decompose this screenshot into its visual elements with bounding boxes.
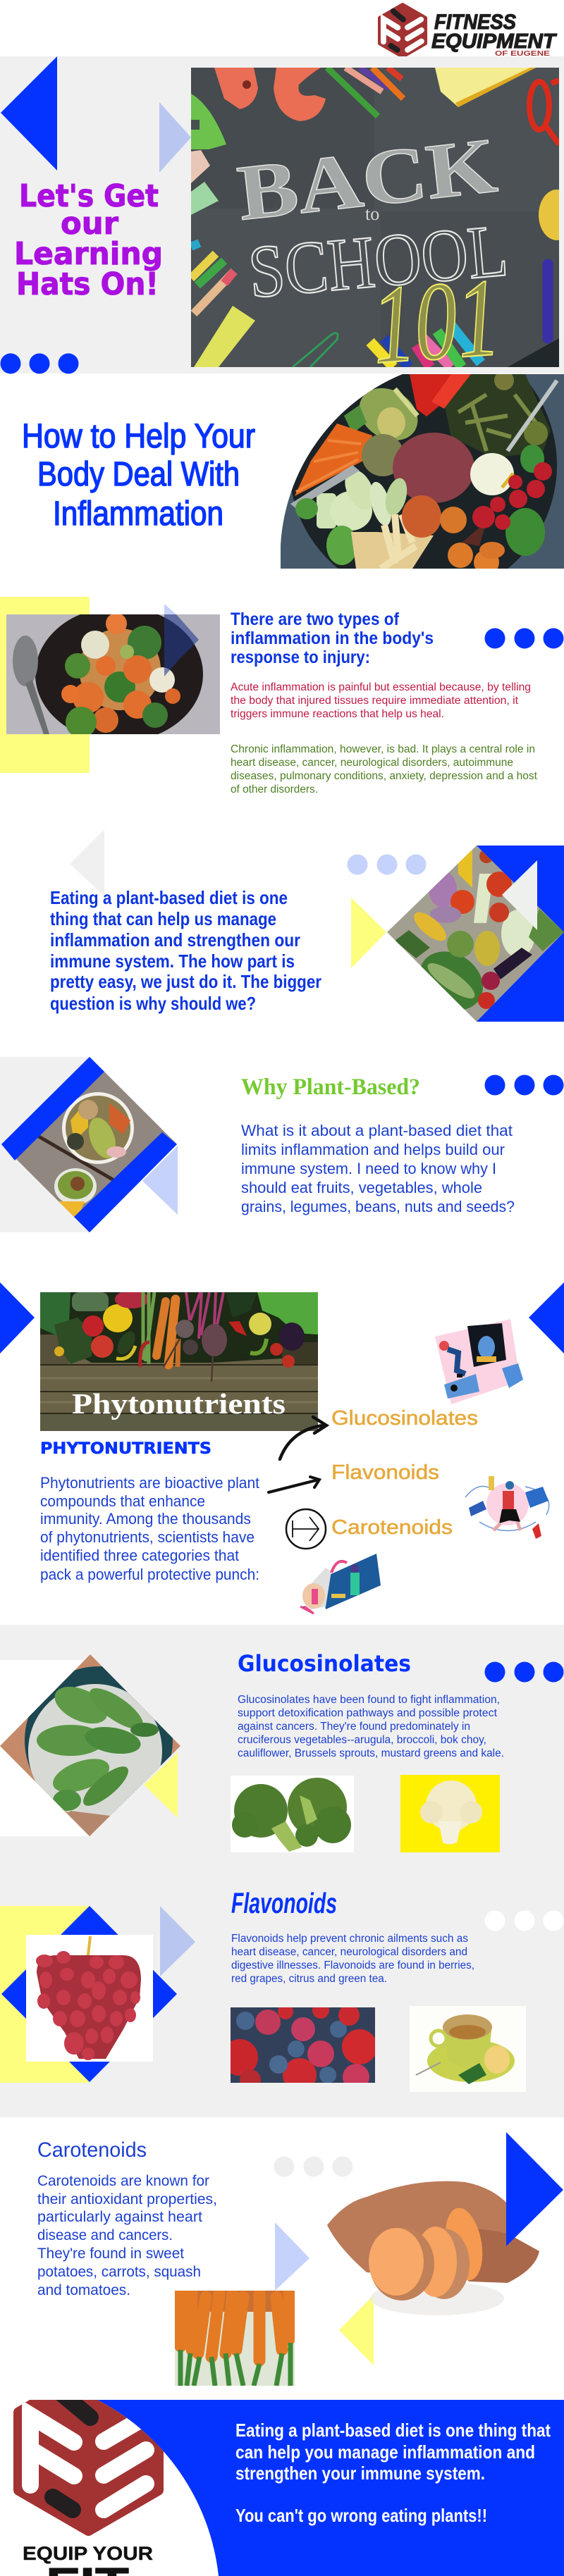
parsnips [351, 532, 434, 569]
photo: vegetable bowl [281, 374, 564, 569]
intro text: immune system. The how part is [50, 950, 295, 972]
heading: response to injury: [231, 648, 370, 667]
blue diamond [1, 1906, 177, 2082]
paragraph: What is it about a plant-based diet that [241, 1122, 513, 1139]
triangle: light blue [275, 2222, 309, 2291]
triangle: blue [1, 56, 57, 171]
logo wordmark: EQUIPMENT [431, 30, 557, 53]
paragraph: Carotenoids are known for [37, 2173, 209, 2189]
panel: two types of inflammation [0, 597, 564, 795]
photo: vegetables on wood [40, 1290, 318, 1431]
heading: How to Help Your [22, 418, 255, 455]
paragraph: potatoes, carrots, squash [37, 2264, 201, 2280]
chronic text: heart disease, cancer, neurological disorders, autoimmune [231, 757, 513, 769]
intro text [50, 887, 321, 1014]
grey block [0, 1057, 90, 1232]
carrots [295, 423, 372, 496]
intro text: question is why should we? [50, 993, 256, 1014]
arrow: to glucosinolates [280, 1417, 326, 1459]
illustration: people with card [300, 1554, 381, 1614]
illustration: dog walker [465, 1476, 549, 1539]
intro text: pretty easy, we just do it. The bigger [50, 971, 321, 992]
triangle: yellow [339, 2295, 374, 2365]
paragraph: pack a powerful protective punch: [40, 1566, 259, 1583]
illustration: people with laptop [435, 1319, 523, 1404]
paragraph: flavonoids: heart disease, cancer, neurological disorders and [231, 1946, 467, 1958]
heading: flavonoids: Flavonoids [231, 1887, 337, 1919]
photo: chalkboard back to school [191, 68, 564, 388]
red peppers [410, 374, 451, 416]
paragraph: and tomatoes. [37, 2282, 130, 2298]
logo [19, 2372, 158, 2530]
intro text: inflammation and strengthen our [50, 929, 300, 950]
dots [0, 354, 79, 373]
acute text: Acute inflammation is painful but essential because, by telling [231, 681, 531, 693]
yogurt [470, 453, 514, 495]
blue block [477, 846, 564, 1022]
photo: green tea [410, 2006, 526, 2092]
photo: broccoli [231, 1776, 354, 1852]
paragraph: glucosinolates: against cancers. They're found predominately in [238, 1721, 470, 1733]
closing text: strengthen your immune system. [235, 2463, 485, 2484]
paragraph [40, 1474, 259, 1583]
chalk lettering [236, 140, 506, 364]
photo: red grapes [26, 1935, 153, 2062]
paragraph: flavonoids: digestive illnesses. Flavonoids are found in berries, [231, 1959, 474, 1971]
leaves by carrots [344, 405, 367, 430]
paragraph: compounds that enhance [40, 1492, 205, 1510]
greens [40, 1292, 70, 1335]
chronic text: Chronic inflammation, however, is bad. It plays a central role in [231, 743, 535, 755]
acute text: triggers immune reactions that help us heal. [231, 708, 444, 720]
notebook [435, 68, 536, 107]
chalk lettering: BACK [233, 122, 501, 237]
logo wordmark: FITNESS [434, 11, 516, 34]
triangle: yellow [144, 1752, 178, 1818]
heading: Inflammation [53, 495, 223, 533]
panel: back to school hero [0, 56, 564, 388]
photo caption: Phytonutrients [72, 1387, 286, 1420]
dots [485, 628, 564, 648]
photo: arugula diamond [0, 1654, 180, 1836]
yarn ball [539, 190, 559, 240]
paragraph: disease and cancers. [37, 2227, 173, 2243]
beets [176, 1320, 194, 1338]
panel: why plant-based [0, 1057, 564, 1233]
paragraph: glucosinolates: Glucosinolates have been found to fight inflammation, [238, 1694, 500, 1706]
paragraph: should eat fruits, vegetables, whole [241, 1179, 482, 1196]
paragraph: their antioxidant properties, [37, 2191, 217, 2207]
paragraph: glucosinolates: support detoxification pathways and possible protect [238, 1707, 498, 1719]
chalk lettering: SCHOOL [245, 209, 511, 314]
photo: berries [221, 2002, 377, 2092]
paragraph: grains, legumes, beans, nuts and seeds? [241, 1198, 515, 1215]
paragraph: glucosinolates: cruciferous vegetables--arugula, broccoli, bok choy, [238, 1734, 486, 1746]
paragraph: They're found in sweet [37, 2246, 184, 2262]
paragraph: flavonoids [231, 1933, 474, 1985]
blue bands [1, 1057, 177, 1232]
red rice [393, 433, 474, 503]
panel: phytonutrients [0, 1282, 564, 1614]
vegetables [79, 628, 161, 710]
paragraph: particularly against heart [37, 2209, 202, 2225]
title: let's get our learning hats on: Learning [14, 236, 163, 272]
acute text [231, 681, 531, 720]
paragraph: Phytonutrients are bioactive plant [40, 1474, 259, 1492]
paragraph: glucosinolates: cauliflower, Brussels sprouts, mustard greens and kale. [238, 1747, 504, 1759]
avocado [360, 388, 417, 440]
label: flavonoids: Flavonoids [331, 1461, 439, 1484]
dots [485, 1911, 564, 1931]
dots [485, 1661, 564, 1683]
dots [485, 1075, 564, 1095]
panel: how to help [24, 374, 564, 569]
white block [0, 1660, 90, 1836]
dots [347, 854, 426, 875]
pencils [327, 68, 403, 116]
triangle: left blue [0, 1282, 35, 1354]
heading: Carotenoids [37, 2138, 147, 2162]
title: let's get our learning hats on: Hats On! [16, 266, 159, 302]
yellow block [0, 597, 90, 773]
triangle overlay [164, 614, 199, 676]
chalk [191, 150, 219, 215]
chronic text: diseases, pulmonary conditions, anxiety, depression and a host [231, 770, 538, 782]
chalk lettering: to [365, 204, 379, 224]
paragraph: limits inflammation and helps build our [241, 1141, 505, 1158]
heading [231, 609, 434, 667]
panel: plant-based diet intro [50, 829, 564, 1022]
intro text: Eating a plant-based diet is one [50, 887, 288, 908]
triangle: light blue [160, 1906, 195, 1976]
paragraph: of phytonutrients, scientists have [40, 1528, 255, 1546]
tomatoes [472, 462, 552, 530]
beet stems [186, 1292, 223, 1339]
chalk lettering: 101 [368, 256, 503, 388]
title: let's get our learning hats on: Let's Get [19, 178, 159, 214]
triangle: grey [70, 829, 104, 896]
title: let's get our learning hats on [14, 178, 163, 302]
dots [274, 2156, 352, 2177]
broccoli [438, 374, 551, 458]
tagline: EQUIP YOUR [23, 2543, 153, 2564]
paragraph: flavonoids: red grapes, citrus and green tea. [231, 1973, 387, 1985]
icon: circled arrow [286, 1509, 326, 1549]
triangle: light blue behind photo [164, 604, 176, 614]
right marker [543, 264, 553, 338]
closing text: You can't go wrong eating plants!! [235, 2505, 487, 2526]
triangle: light grey [502, 860, 537, 930]
triangle: yellow [351, 898, 386, 968]
photo: carrots [175, 2291, 295, 2386]
photo: diamond rice bowl [0, 1057, 178, 1233]
title: let's get our learning hats on: our [61, 206, 118, 242]
paragraph [241, 1122, 515, 1215]
heading [22, 418, 255, 533]
chronic text: of other disorders. [231, 784, 318, 795]
cucumbers [317, 493, 336, 528]
carrots [157, 1301, 166, 1356]
triangle: right blue [529, 1282, 564, 1354]
panel: closing banner [0, 2372, 564, 2576]
green onions [143, 1292, 154, 1364]
triangle: light blue [142, 1146, 178, 1215]
markers left [191, 243, 234, 314]
carrot coins [440, 507, 467, 533]
heading: Why Plant-Based? [241, 1075, 420, 1100]
triangle: blue [506, 2132, 563, 2246]
heading: glucosinolates: Glucosinolates [238, 1650, 411, 1677]
photo: vegetable bowl with spoon [6, 614, 220, 734]
paragraph: flavonoids: Flavonoids help prevent chronic ailments such as [231, 1933, 468, 1945]
label: glucosinolates: Glucosinolates [331, 1407, 478, 1430]
scissors [529, 80, 559, 144]
closing text [235, 2420, 551, 2526]
bottom markers [370, 326, 481, 367]
lettuce [295, 498, 318, 519]
white circle [0, 2400, 219, 2576]
paperclip [293, 333, 338, 367]
photo: cauliflower [400, 1775, 500, 1852]
paragraph [37, 2173, 217, 2298]
heading: Body Deal With [37, 456, 240, 493]
label: carotenoids: Carotenoids [331, 1516, 453, 1539]
arrow: to flavonoids [269, 1477, 319, 1492]
tomatoes and pepper [82, 1315, 104, 1337]
chronic text [231, 743, 538, 795]
logo icon [380, 5, 425, 56]
triangle: light blue [159, 102, 191, 173]
panel: grey nutrient section [0, 1625, 564, 2117]
hummus [402, 495, 441, 538]
logo wordmark [431, 11, 557, 58]
heading: PHYTONUTRIENTS [40, 1440, 212, 1458]
heading: inflammation in the body's [231, 628, 434, 648]
ruler [194, 306, 255, 367]
photo: diamond vegetables [387, 846, 564, 1022]
header logo [380, 5, 557, 58]
pesto [362, 434, 404, 476]
paragraph: identified three categories that [40, 1547, 239, 1564]
yellow block [0, 1906, 90, 2083]
right side produce [228, 1321, 247, 1336]
photo: sweet potato [327, 2181, 539, 2315]
paragraph: immune system. I need to know why I [241, 1160, 496, 1177]
paragraph: glucosinolates [238, 1694, 504, 1759]
letter blocks [191, 68, 326, 149]
paragraph: immunity. Among the thousands [40, 1510, 251, 1528]
logo wordmark: OF EUGENE [495, 50, 550, 58]
heading: There are two types of [231, 609, 400, 629]
acute text: the body that injured tissues require immediate attention, it [231, 695, 519, 707]
intro text: thing that can help us manage [50, 908, 276, 929]
panel: carotenoids [37, 2132, 563, 2386]
